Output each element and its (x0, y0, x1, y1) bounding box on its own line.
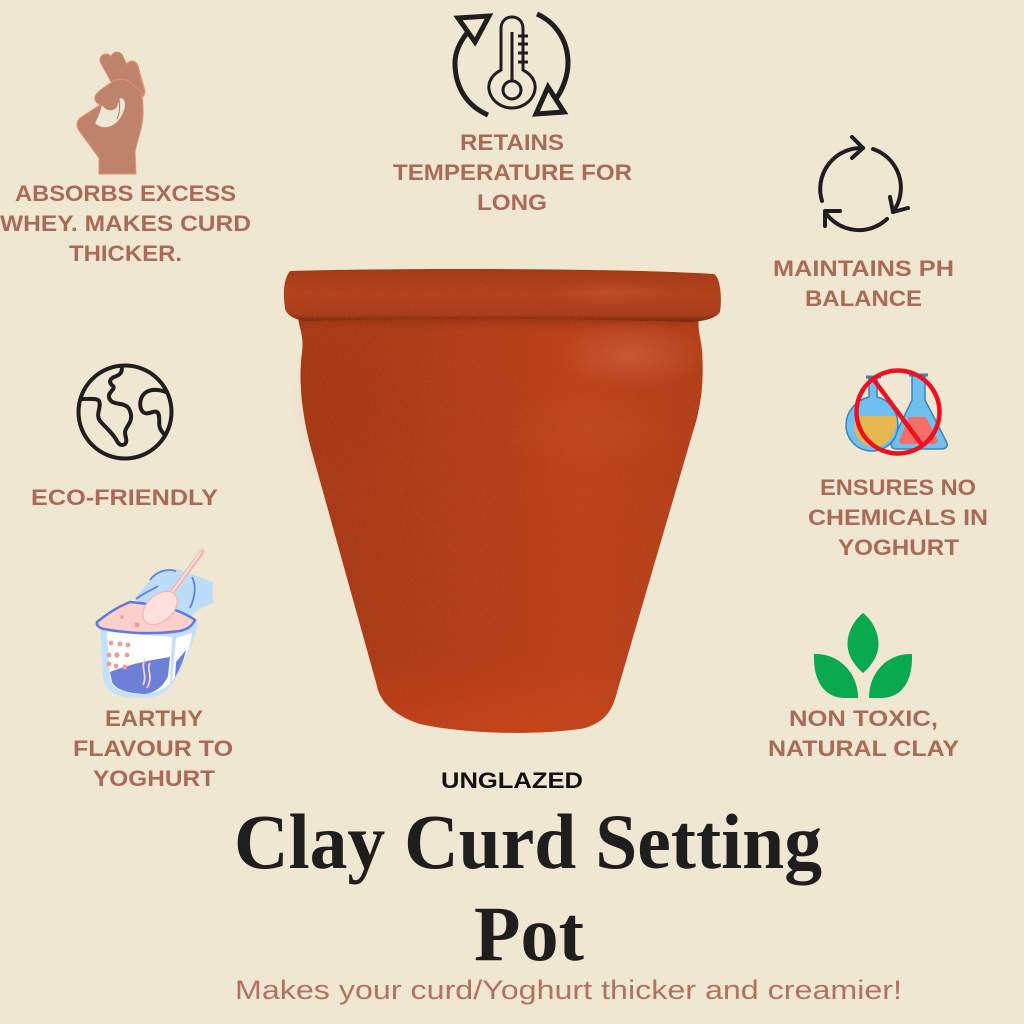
benefit: no chemicals (808, 370, 988, 560)
benefit: eco-friendly (31, 366, 218, 510)
subtitle: Makes your curd/Yoghurt thicker and creamier! (235, 975, 902, 1005)
label: maintains pH balance: MAINTAINS PH (773, 256, 954, 281)
label: non toxic: NATURAL CLAY (768, 736, 959, 761)
benefit: retains temperature (393, 14, 632, 215)
icon: yoghurt cup with spoon (97, 552, 213, 698)
label: maintains pH balance (773, 256, 954, 311)
label: retains temperature: LONG (477, 190, 547, 215)
label: non toxic (768, 706, 959, 761)
benefit: earthy flavour (73, 552, 233, 791)
label: no chemicals: YOGHURT (838, 535, 959, 560)
label: absorbs excess whey (0, 181, 251, 266)
label: non toxic: NON TOXIC, (789, 706, 938, 731)
benefit: absorbs excess whey (0, 58, 251, 266)
label: no chemicals (808, 475, 988, 560)
benefit: non toxic (768, 613, 959, 761)
label: retains temperature: RETAINS (460, 130, 564, 155)
title (234, 798, 822, 977)
label: earthy flavour (73, 706, 233, 791)
label: absorbs excess whey: WHEY. MAKES CURD (0, 211, 251, 236)
label: earthy flavour: YOGHURT (93, 766, 215, 791)
title: Clay Curd Setting (234, 798, 822, 885)
label: absorbs excess whey: ABSORBS EXCESS (15, 181, 236, 206)
benefit: maintains pH balance (773, 137, 954, 311)
label: eco-friendly: ECO-FRIENDLY (31, 485, 218, 510)
icon: recycle arrows (820, 137, 908, 230)
label: retains temperature: TEMPERATURE FOR (393, 160, 632, 185)
eyebrow: unglazed: UNGLAZED (441, 768, 583, 793)
icon: crossed-out flasks (846, 370, 947, 454)
clay pot image (280, 265, 725, 735)
icon: OK hand (77, 58, 143, 174)
label: earthy flavour: FLAVOUR TO (73, 736, 233, 761)
label: no chemicals: CHEMICALS IN (808, 505, 988, 530)
label: retains temperature (393, 130, 632, 215)
icon: globe (78, 366, 172, 458)
label: earthy flavour: EARTHY (105, 706, 203, 731)
icon: thermometer with cycle arrows (455, 14, 568, 115)
label: no chemicals: ENSURES NO (820, 475, 976, 500)
title: Pot (474, 890, 584, 977)
icon: green leaves (814, 613, 912, 698)
label: maintains pH balance: BALANCE (805, 286, 922, 311)
label: absorbs excess whey: THICKER. (69, 241, 182, 266)
